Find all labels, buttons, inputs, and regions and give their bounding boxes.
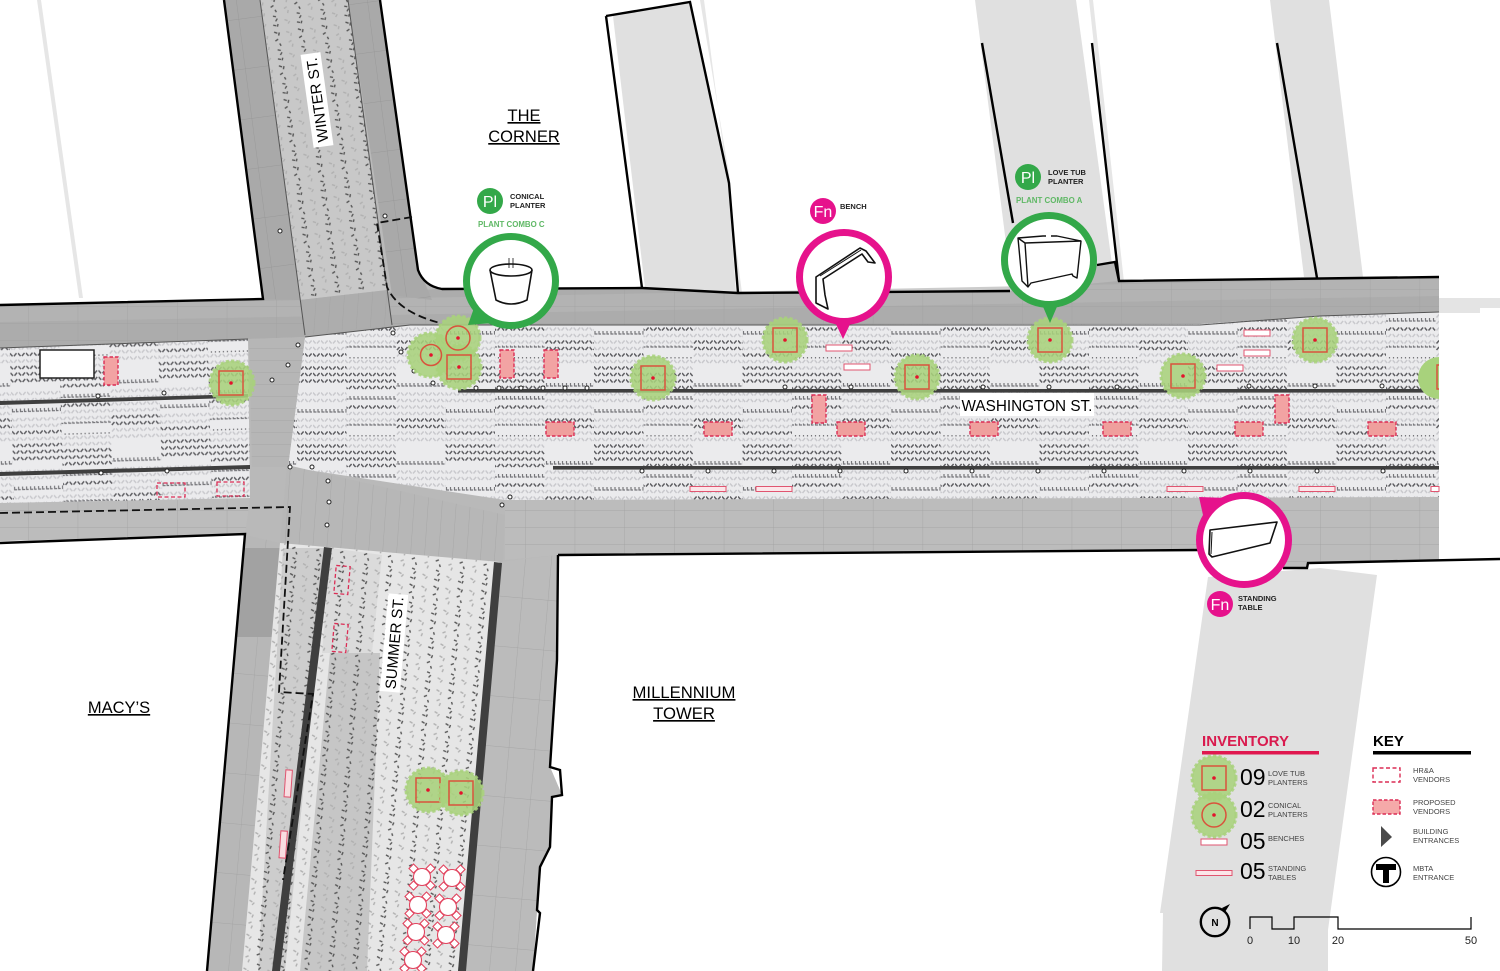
inventory row: conical planters: CONICAL (1268, 801, 1301, 810)
panel: key (1372, 733, 1471, 886)
key row: proposed vendors: PROPOSED (1413, 798, 1456, 807)
callout text: conical planter: PLANTER (510, 201, 546, 210)
planter trees (210, 316, 1439, 815)
label: The Corner: CORNER (488, 128, 560, 146)
callout text: love tub planter: PLANTER (1048, 177, 1084, 186)
benches (826, 330, 1270, 371)
callout text: conical planter: CONICAL (510, 192, 545, 201)
HR&A vendors (157, 482, 350, 653)
callout text: love tub planter: LOVE TUB (1048, 168, 1087, 177)
inventory row: love tub planters: PLANTERS (1268, 778, 1308, 787)
inventory row: standing tables: STANDING (1268, 864, 1306, 873)
key row: MBTA entrance: ENTRANCE (1413, 873, 1454, 882)
key row: MBTA entrance: MBTA (1413, 864, 1433, 873)
inventory row: conical planters (1192, 793, 1308, 837)
standing tables (279, 486, 1439, 858)
inventory row: benches: BENCHES (1268, 834, 1304, 843)
callout text: bench: BENCH (840, 202, 867, 211)
label: Washington St.: WASHINGTON ST. (962, 398, 1092, 415)
icon: love tub planter (1018, 233, 1081, 287)
key row: HR&A vendors: HR&A (1413, 766, 1434, 775)
key heading: KEY (1373, 733, 1404, 750)
scale bar: 50 (1465, 935, 1477, 947)
icon: north arrow: N (1211, 918, 1219, 929)
inventory row: love tub planters: 09 (1240, 764, 1266, 790)
label: Millennium Tower: TOWER (653, 704, 715, 723)
icon: conical planter (490, 258, 532, 304)
inventory row: conical planters: 02 (1240, 796, 1266, 822)
key row: MBTA entrance (1372, 858, 1454, 886)
inventory heading: INVENTORY (1202, 733, 1289, 750)
kiosk on Washington St. (40, 350, 94, 378)
scale bar: 0 (1247, 935, 1253, 947)
badge: Pl: Pl (1021, 170, 1035, 187)
badge: Fn: Fn (1211, 597, 1229, 614)
badge: Pl: Pl (483, 194, 497, 211)
callout: conical planter (466, 188, 556, 326)
icon: standing table (1209, 522, 1277, 557)
inventory row: standing tables (1196, 858, 1306, 884)
proposed vendors (104, 350, 1396, 436)
badge: Pl (1015, 164, 1041, 190)
callout: bench (800, 198, 888, 339)
callout text: standing table: TABLE (1238, 603, 1262, 612)
badge: Fn (810, 198, 836, 224)
label: Winter St.: WINTER ST. (304, 57, 332, 143)
key row: HR&A vendors (1373, 766, 1450, 784)
panel: inventory (1192, 733, 1319, 884)
inventory row: standing tables: 05 (1240, 858, 1266, 884)
key row: proposed vendors (1373, 798, 1456, 816)
inventory row: love tub planters (1192, 756, 1308, 800)
callout: love tub planter (1004, 164, 1094, 323)
inventory row: love tub planters: LOVE TUB (1268, 769, 1305, 778)
dashed project boundary (0, 217, 440, 880)
cafe tables (400, 864, 465, 971)
label: Macy's: MACY’S (88, 699, 150, 717)
callout: standing table (1199, 496, 1288, 617)
key row: proposed vendors: VENDORS (1413, 807, 1450, 816)
inventory row: benches (1201, 828, 1304, 854)
transit tracks (0, 389, 1439, 971)
key row: HR&A vendors: VENDORS (1413, 775, 1450, 784)
scale bar: 10 (1288, 935, 1300, 947)
callout text: plant combo C: PLANT COMBO C (478, 220, 545, 229)
Winter St. paving (260, 0, 392, 335)
scale bar (1247, 917, 1477, 947)
icon: north arrow (1201, 904, 1230, 936)
key row: building entrances: ENTRANCES (1413, 836, 1459, 845)
Washington St. paving (0, 312, 1439, 562)
callout text: plant combo A: PLANT COMBO A (1016, 196, 1083, 205)
label: The Corner: THE (508, 107, 540, 125)
badge: Fn: Fn (814, 204, 832, 221)
label: Millennium Tower: MILLENNIUM (633, 683, 735, 702)
bollards (96, 214, 1385, 527)
callout text: standing table: STANDING (1238, 594, 1277, 603)
scale bar: 20 (1332, 935, 1344, 947)
inventory row: standing tables: TABLES (1268, 873, 1296, 882)
icon: bench (816, 248, 875, 309)
inventory row: conical planters: PLANTERS (1268, 810, 1308, 819)
label: Summer St.: SUMMER ST. (382, 596, 407, 690)
key row: building entrances: BUILDING (1413, 827, 1449, 836)
Summer St. paving (242, 543, 500, 971)
inventory row: benches: 05 (1240, 828, 1266, 854)
key row: building entrances (1381, 826, 1459, 847)
